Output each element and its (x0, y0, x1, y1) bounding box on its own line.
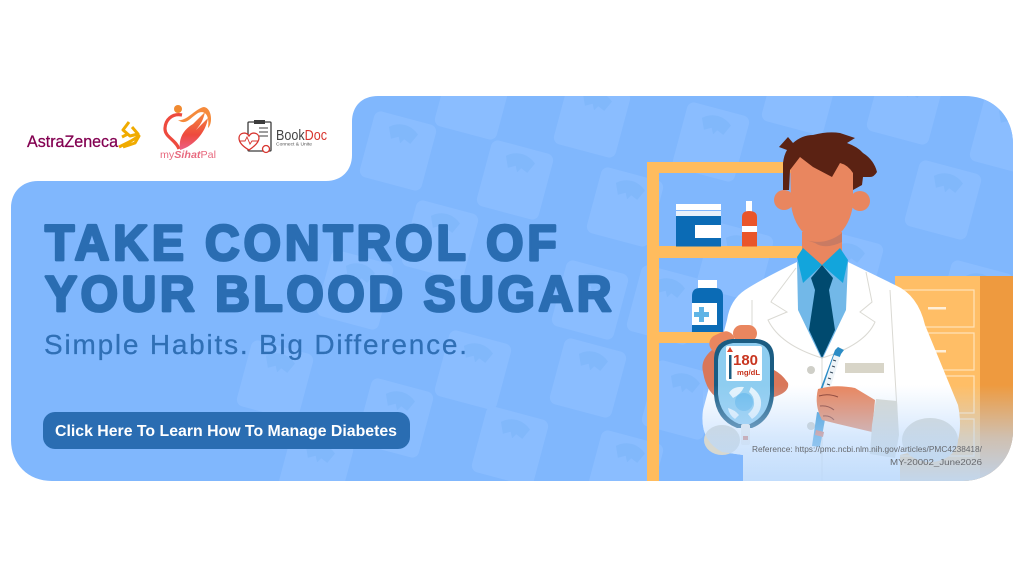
logo: BookDoc (239, 120, 327, 152)
logo: mySihatPal (160, 105, 216, 161)
title: YOUR BLOOD SUGAR (45, 267, 611, 322)
reference note: MY-20002_June2026 (890, 457, 982, 467)
logo: BookDoc: Connect & Unite (276, 142, 313, 146)
glucose meter and hand: mg/dL (737, 368, 760, 377)
bottom fade overlay (702, 389, 1013, 481)
coat lapels (752, 268, 897, 490)
background pattern: weighing scales (237, 96, 1013, 481)
title (45, 216, 611, 322)
coat buttons (807, 366, 815, 430)
logo: AstraZeneca: AstraZeneca (27, 132, 119, 151)
logo: mySihatPal: mySihatPal (160, 149, 216, 161)
insulin pen and hand (812, 347, 875, 447)
coat name tag (845, 363, 884, 373)
doctor hair (779, 132, 877, 190)
doctor shirt (797, 262, 848, 360)
doctor coat (702, 262, 960, 490)
doctor tie (809, 265, 835, 358)
cabinet (895, 276, 1016, 486)
coat cuff (870, 399, 899, 458)
subtitle: Simple Habits. Big Difference. (44, 329, 467, 360)
reference note: Reference: https://pmc.ncbi.nlm.nih.gov/articles/PMC4238418/ (752, 444, 983, 454)
logo: BookDoc: BookDoc (276, 127, 327, 144)
doctor neck (802, 232, 842, 268)
panel: blue banner background (11, 96, 1013, 481)
doctor collar (797, 248, 848, 283)
glucose meter and hand (702, 325, 788, 445)
icon: blue jar (676, 204, 721, 246)
icon: medicine bottle (692, 280, 723, 332)
call to action button (43, 412, 410, 449)
reference note (752, 444, 983, 467)
shelf (647, 162, 807, 487)
doctor ears (774, 190, 870, 211)
logo: AstraZeneca (27, 122, 139, 151)
icon: orange bottle (742, 201, 757, 246)
glucose meter and hand: 180 (733, 353, 758, 369)
infographic banner (11, 96, 1013, 481)
doctor illustration (702, 132, 960, 490)
call to action button: Click Here To Learn How To Manage Diabetes (55, 423, 397, 440)
doctor face (790, 157, 853, 232)
title: TAKE CONTROL OF (45, 216, 557, 271)
